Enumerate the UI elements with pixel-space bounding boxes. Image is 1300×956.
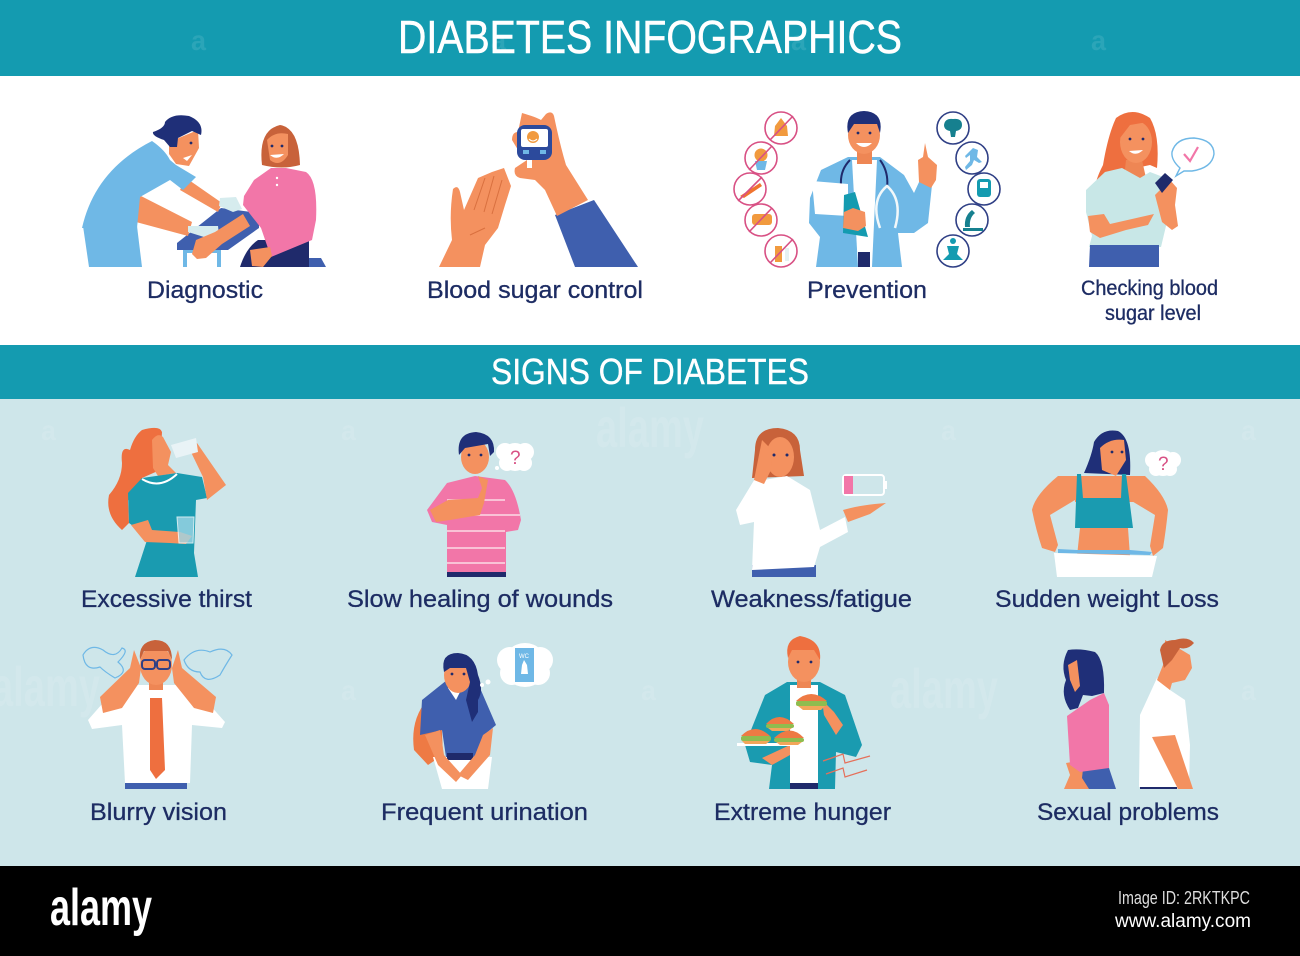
footer logo: alamy <box>50 879 152 937</box>
panel: blood sugar control <box>427 112 643 304</box>
watermarks: a <box>1241 675 1256 706</box>
watermarks <box>0 25 1256 720</box>
watermarks: a <box>341 415 356 446</box>
label: Checking blood <box>1081 277 1218 300</box>
icon: avoid circles <box>734 112 797 267</box>
title banner: DIABETES INFOGRAPHICS <box>398 11 902 63</box>
label: Weakness/fatigue <box>711 586 912 613</box>
icon: patient <box>192 125 326 267</box>
section banner: signs of diabetes <box>0 345 1300 399</box>
watermarks: a <box>41 415 56 446</box>
icon: thought bubble question: ? <box>510 448 521 469</box>
icon: woman turned away <box>1063 649 1116 789</box>
icon: thought bubble question <box>495 443 534 471</box>
icon: man with burgers <box>737 636 862 789</box>
label: Blurry vision <box>90 799 227 826</box>
watermarks: a <box>941 415 956 446</box>
label: Frequent urination <box>381 799 588 826</box>
watermarks: a <box>191 25 206 56</box>
icon: thought bubble question <box>1145 450 1181 476</box>
panel: diagnostic <box>82 115 326 304</box>
icon: check speech bubble <box>1172 138 1214 176</box>
icon: woman with backpack <box>413 653 496 789</box>
sign: extreme hunger <box>714 636 891 826</box>
icon: hand with glucose meter <box>512 112 588 216</box>
watermarks: a <box>491 25 506 56</box>
icon: woman with loose pants <box>1032 430 1168 577</box>
watermarks: a <box>1241 415 1256 446</box>
sign: excessive thirst <box>81 428 252 613</box>
icon: thought bubble with WC door: WC <box>519 654 530 660</box>
sign: frequent urination <box>381 643 588 826</box>
icon: low battery <box>843 475 887 495</box>
label: Blood sugar control <box>427 277 643 304</box>
label: sugar level <box>1105 302 1201 325</box>
icon: man turned away <box>1139 639 1194 789</box>
watermarks: alamy <box>890 657 998 720</box>
icon: doctor <box>809 111 937 267</box>
title banner <box>0 0 1300 76</box>
icon: nurse <box>82 115 242 267</box>
label: Prevention <box>807 277 927 304</box>
sign: sexual problems <box>1037 639 1219 826</box>
panel: prevention <box>734 111 1000 304</box>
footer image id: www.alamy.com <box>1114 911 1251 932</box>
icon: healthy habit circles <box>937 112 1000 267</box>
icon: thought bubble question: ? <box>1158 454 1169 475</box>
label: Slow healing of wounds <box>347 586 613 613</box>
icon: person with wound <box>427 432 521 577</box>
icon: woman with meter <box>1086 112 1178 267</box>
watermarks: a <box>641 675 656 706</box>
footer image id <box>1114 888 1251 932</box>
watermarks: a <box>1091 25 1106 56</box>
icon: thought bubble with WC door <box>480 643 553 687</box>
icon: man with glasses <box>88 640 225 789</box>
sign: slow healing <box>347 432 613 613</box>
watermarks: alamy <box>596 396 704 459</box>
label: Sudden weight Loss <box>995 586 1219 613</box>
sign: weakness <box>711 428 912 613</box>
icon: exam table <box>177 208 259 267</box>
label: Sexual problems <box>1037 799 1219 826</box>
label: Diagnostic <box>147 277 263 304</box>
icon: woman drinking <box>108 428 226 577</box>
panel: checking blood sugar level <box>1081 112 1218 325</box>
icon: blurry swirls <box>83 647 232 679</box>
watermarks: a <box>791 25 806 56</box>
sign: sudden weight loss <box>995 430 1219 613</box>
sign: blurry vision <box>83 640 232 826</box>
icon: open hand <box>439 168 511 267</box>
icon: stomach zigzag lines <box>823 754 870 777</box>
icon: sleeve <box>555 200 638 267</box>
label <box>1081 277 1218 325</box>
icon: tired woman <box>736 428 886 577</box>
section banner: signs of diabetes: SIGNS OF DIABETES <box>491 351 809 392</box>
label: Extreme hunger <box>714 799 891 826</box>
footer bar <box>0 866 1300 956</box>
watermarks: a <box>341 675 356 706</box>
label: Excessive thirst <box>81 586 252 613</box>
footer image id: Image ID: 2RKTKPC <box>1118 888 1250 908</box>
